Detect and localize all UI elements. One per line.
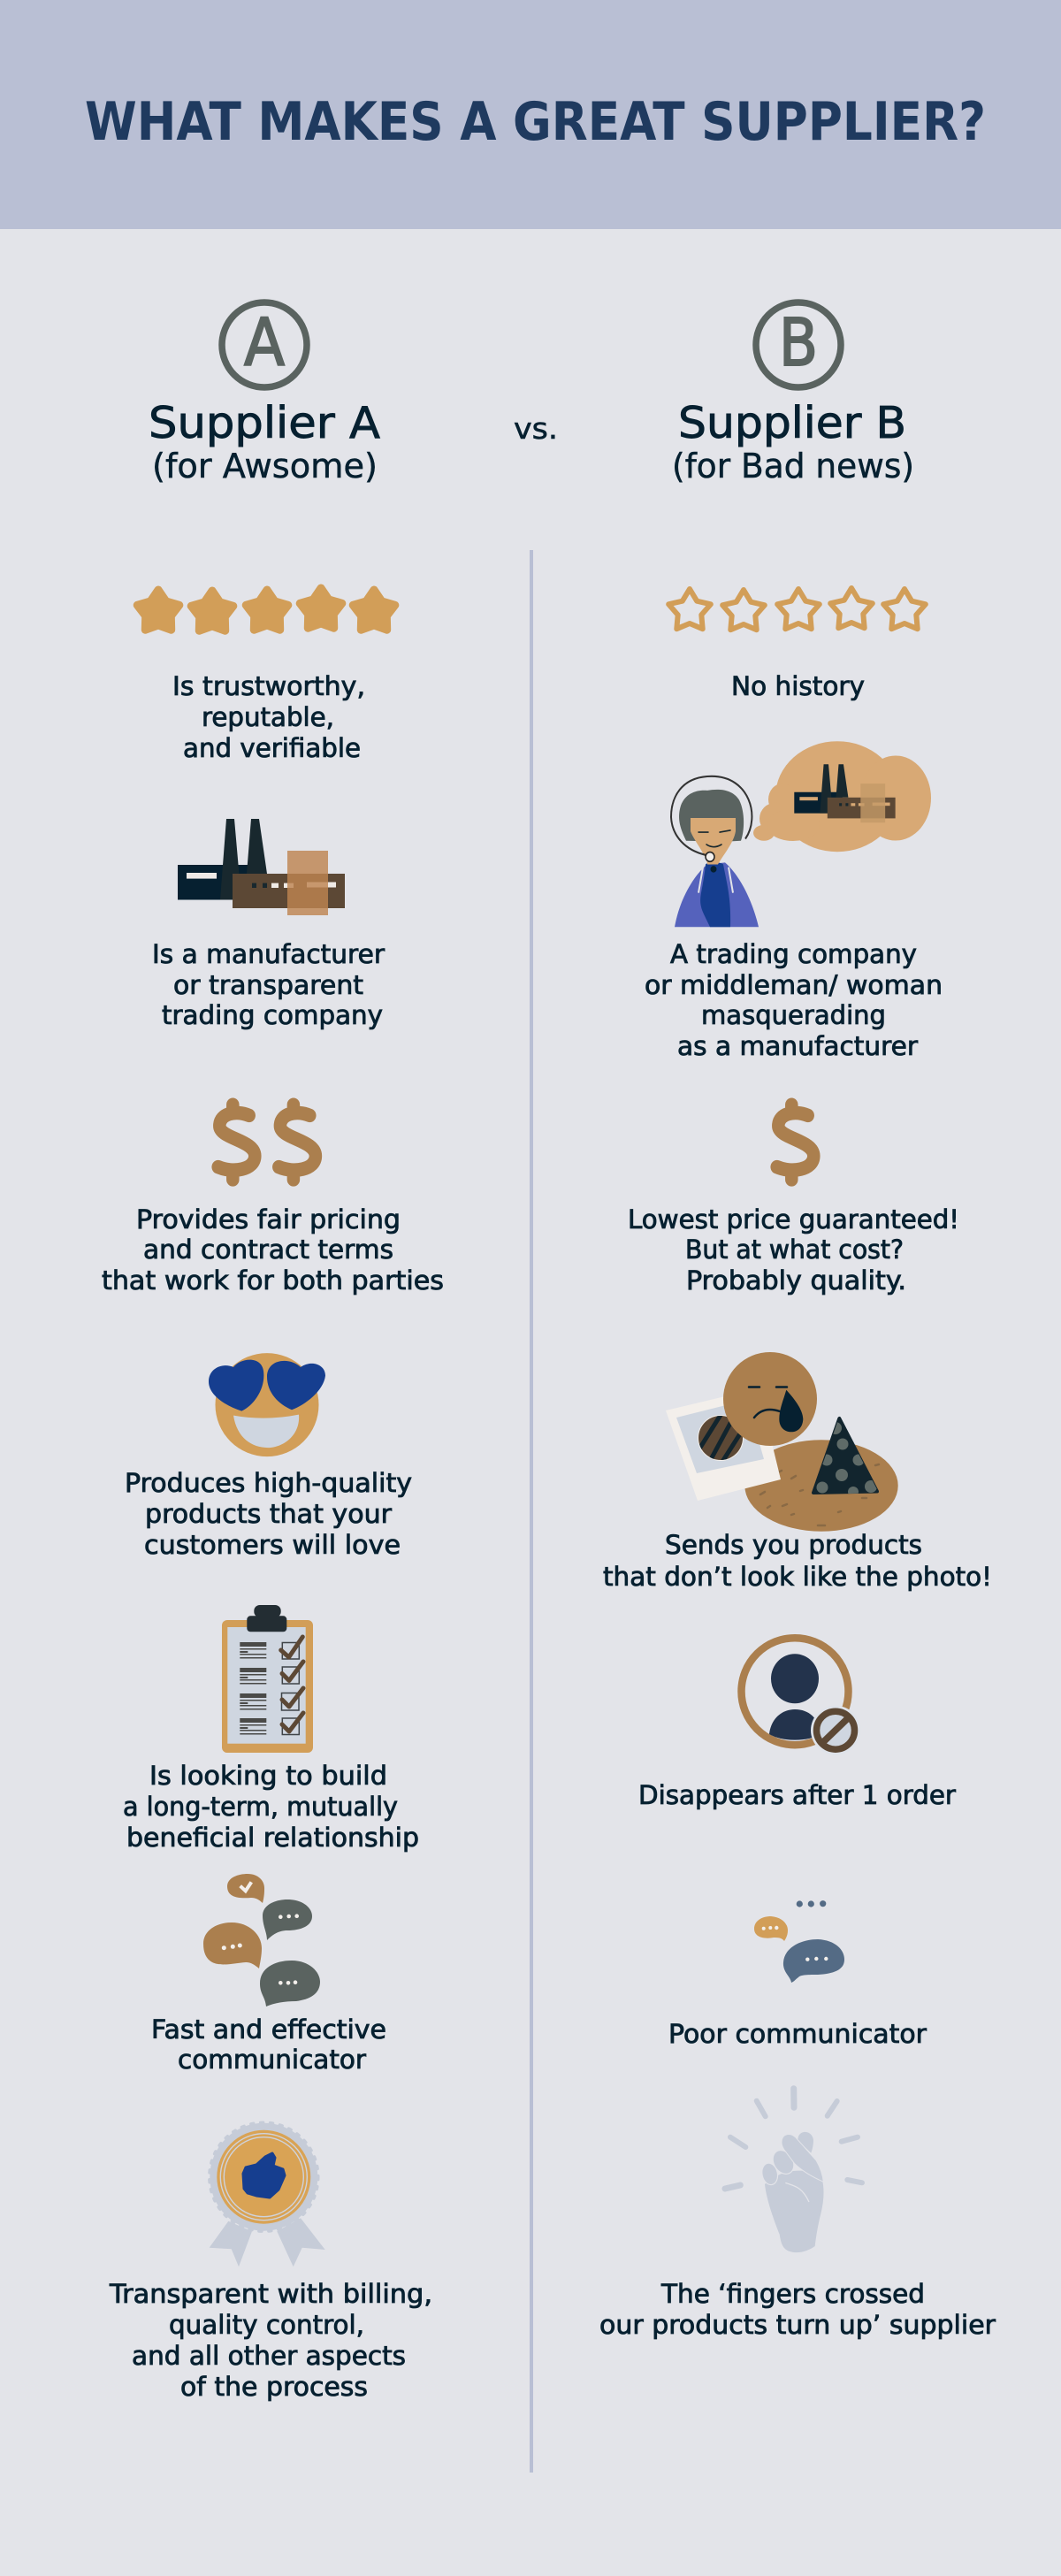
text: lowest price: Probably quality. [686, 1265, 906, 1296]
text: trading company: A trading company [670, 939, 917, 969]
text: lowest price: But at what cost? [685, 1234, 904, 1265]
text: products unlike photo [603, 1530, 992, 1592]
header banner [0, 0, 1061, 229]
text: high quality: Produces high-quality [125, 1468, 412, 1498]
check marks [281, 1637, 303, 1731]
heading: Supplier A [149, 398, 380, 485]
icon: user with prohibition sign [741, 1638, 860, 1755]
icon: two dollar signs [218, 1105, 316, 1180]
icon: award rosette with thumbs-up [210, 2122, 325, 2266]
text: transparent: and all other aspects [132, 2341, 406, 2371]
text: trading company: masquerading [701, 1000, 886, 1030]
text: long-term relationship [123, 1761, 419, 1853]
polaroid photo [666, 1388, 781, 1501]
icon: sparse chat bubbles [754, 1900, 844, 1983]
heading: Supplier A: Supplier A [149, 398, 380, 448]
icon: crossed fingers [725, 2089, 862, 2252]
icon: woman imagining a factory [671, 741, 931, 927]
woman [671, 776, 759, 927]
text: fast communicator [151, 2014, 386, 2075]
cookie [744, 1440, 898, 1532]
text: manufacturer: or transparent [173, 970, 363, 1000]
text: transparent: Transparent with billing, [109, 2279, 432, 2309]
text: lowest price [628, 1204, 959, 1296]
check boxes [281, 1643, 299, 1735]
thought cloud [753, 741, 931, 852]
text: trading company: as a manufacturer [677, 1031, 919, 1061]
text: long-term relationship: a long-term, mutually [123, 1792, 398, 1822]
text: trading company: or middleman/ woman [645, 970, 943, 1000]
icon: sad face, photo and cookie [666, 1352, 898, 1532]
text: high quality: customers will love [144, 1530, 401, 1560]
thumbs-up [243, 2153, 285, 2198]
text: high quality: products that your [145, 1499, 393, 1529]
icon: four chat bubbles [203, 1874, 320, 2007]
text: disappears: Disappears after 1 order [638, 1780, 957, 1810]
text: fair pricing: Provides fair pricing [136, 1204, 401, 1234]
icon: clipboard checklist [222, 1605, 313, 1753]
text: fair pricing [102, 1204, 444, 1296]
text: manufacturer: trading company [162, 1000, 383, 1030]
text: fast communicator: communicator [178, 2045, 367, 2075]
text: products unlike photo: that don’t look like the photo! [603, 1562, 992, 1592]
icon: circled B: B [779, 305, 818, 381]
icon: circled B [756, 302, 841, 387]
text: manufacturer: Is a manufacturer [152, 939, 385, 969]
text: products unlike photo: Sends you products [665, 1530, 922, 1560]
text: transparent: of the process [180, 2372, 368, 2402]
heading: Supplier B: Supplier B [678, 398, 906, 448]
dotted triangle [813, 1418, 877, 1493]
heading: Supplier B: (for Bad news) [672, 447, 914, 485]
text: trustworthy: and verifiable [183, 733, 361, 763]
text: long-term relationship: beneficial relationship [126, 1823, 419, 1853]
versus label: vs. [514, 411, 558, 446]
icon: five filled stars [137, 588, 395, 631]
text: trustworthy: Is trustworthy, [172, 671, 365, 701]
text: high quality [125, 1468, 412, 1560]
text: fingers crossed: our products turn up’ supplier [599, 2310, 996, 2340]
text: fair pricing: and contract terms [143, 1234, 393, 1265]
icon: circled A: A [244, 305, 285, 381]
sad face [723, 1352, 817, 1446]
text: fingers crossed: The ‘fingers crossed [660, 2279, 925, 2309]
text: fair pricing: that work for both parties [102, 1265, 444, 1296]
checklist rows [240, 1642, 266, 1735]
text: no history: No history [731, 671, 865, 701]
icon: circled A [222, 302, 307, 387]
heading: Supplier A: (for Awsome) [152, 447, 378, 485]
text: trading company [645, 939, 943, 1061]
text: trustworthy [172, 671, 365, 763]
no sign [811, 1706, 860, 1755]
icon: single dollar sign [777, 1105, 813, 1180]
text: fingers crossed [599, 2279, 996, 2340]
heading: Supplier B [672, 398, 914, 485]
text: lowest price: Lowest price guaranteed! [628, 1204, 959, 1234]
text: fast communicator: Fast and effective [151, 2014, 386, 2045]
icon: five outline stars [668, 588, 926, 630]
icon: heart-eyes emoji [209, 1353, 325, 1456]
text: poor communicator: Poor communicator [668, 2019, 927, 2049]
text: trustworthy: reputable, [202, 702, 334, 732]
small factory in cloud [794, 764, 896, 822]
text: long-term relationship: Is looking to build [149, 1761, 387, 1791]
text: transparent [109, 2279, 432, 2402]
icon: factory [178, 819, 345, 915]
text: manufacturer [152, 939, 385, 1030]
text: transparent: quality control, [169, 2310, 364, 2340]
